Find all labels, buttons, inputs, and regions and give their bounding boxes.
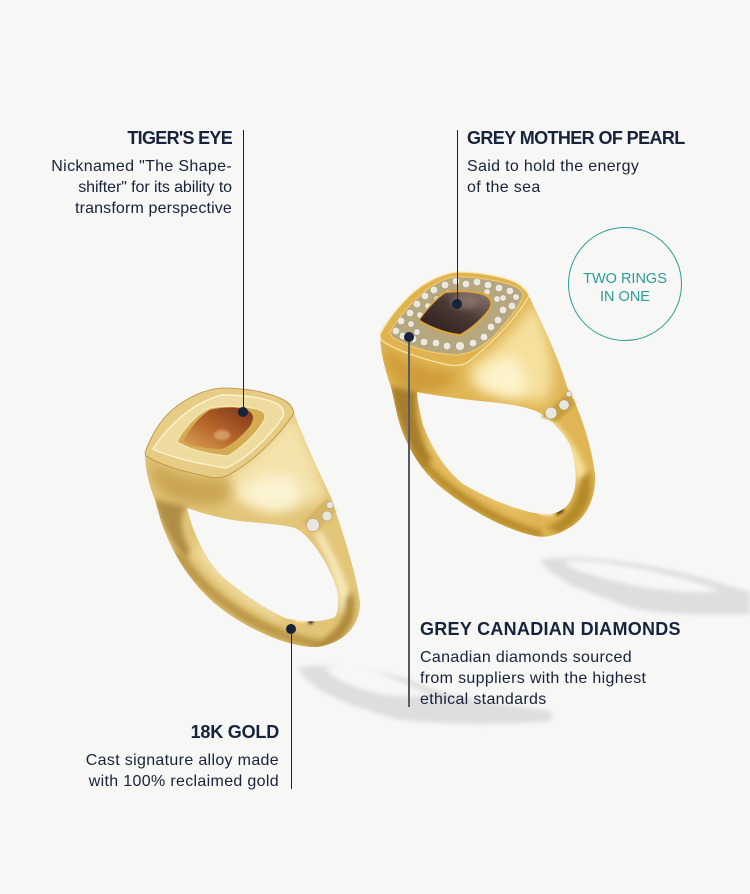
heading: tiger's eye: TIGER'S EYE (127, 128, 232, 148)
heading: grey Canadian diamonds: GREY CANADIAN DIAMONDS (420, 619, 681, 639)
badge: two rings in one (568, 227, 682, 341)
ring 2 shank diamonds (541, 391, 576, 422)
heading: 18k gold: 18K GOLD (191, 722, 279, 742)
ring 1 shank diamonds (302, 498, 336, 532)
text: grey Canadian diamonds description: from suppliers with the highest (420, 670, 646, 687)
text: 18k gold description: with 100% reclaimed gold (89, 773, 279, 790)
ring 2 body with shading (380, 296, 596, 537)
text: tiger's eye description: shifter" for its ability to (78, 179, 232, 196)
text: 18k gold description (86, 752, 279, 790)
illustration: two gold rings with shadows and leader lines (144, 130, 750, 789)
ring 1: tiger's eye (144, 388, 360, 647)
shadow of ring 1 (298, 666, 552, 724)
shadow of ring 2 (540, 558, 750, 615)
ring 1 plate (145, 388, 294, 478)
badge: two rings in one: TWO RINGS (583, 270, 667, 286)
text: tiger's eye description: Nicknamed "The Shape- (51, 158, 232, 175)
callout: grey mother of pearl (467, 128, 685, 196)
leader line and dot: grey mother of pearl (452, 130, 462, 309)
heading: grey mother of pearl: GREY MOTHER OF PEARL (467, 128, 685, 148)
text: grey Canadian diamonds description: ethical standards (420, 691, 547, 708)
text: tiger's eye description: transform perspective (75, 200, 232, 217)
ring 2 stone: grey mother of pearl (420, 292, 490, 334)
ring 1 bezel (177, 406, 265, 456)
leader line and dot: grey Canadian diamonds (404, 332, 414, 707)
text: tiger's eye description (51, 158, 232, 217)
text: 18k gold description: Cast signature alloy made (86, 752, 279, 769)
leader line and dot: tiger's eye (238, 130, 248, 417)
text: grey Canadian diamonds description (420, 649, 646, 708)
callout: 18k gold (86, 722, 279, 790)
ring 1 plate inner recess (153, 395, 284, 468)
callout: tiger's eye (51, 128, 232, 217)
callout: grey Canadian diamonds (420, 619, 681, 708)
text: grey mother of pearl description: of the sea (467, 179, 541, 196)
ring 2 halo of pave diamonds (390, 277, 523, 355)
text: grey mother of pearl description: Said to hold the energy (467, 158, 639, 175)
leader line and dot: 18K gold (286, 624, 296, 789)
text: grey mother of pearl description (467, 158, 639, 196)
ring 2: mother of pearl and diamonds (380, 271, 596, 537)
ring 1 stone: tiger's eye (183, 407, 253, 449)
ring 2 plate (380, 272, 529, 366)
text: grey Canadian diamonds description: Canadian diamonds sourced (420, 649, 632, 666)
ring 1 body with shading (145, 413, 360, 647)
badge: two rings in one: IN ONE (600, 288, 650, 304)
ring 2 bezel (418, 290, 493, 336)
